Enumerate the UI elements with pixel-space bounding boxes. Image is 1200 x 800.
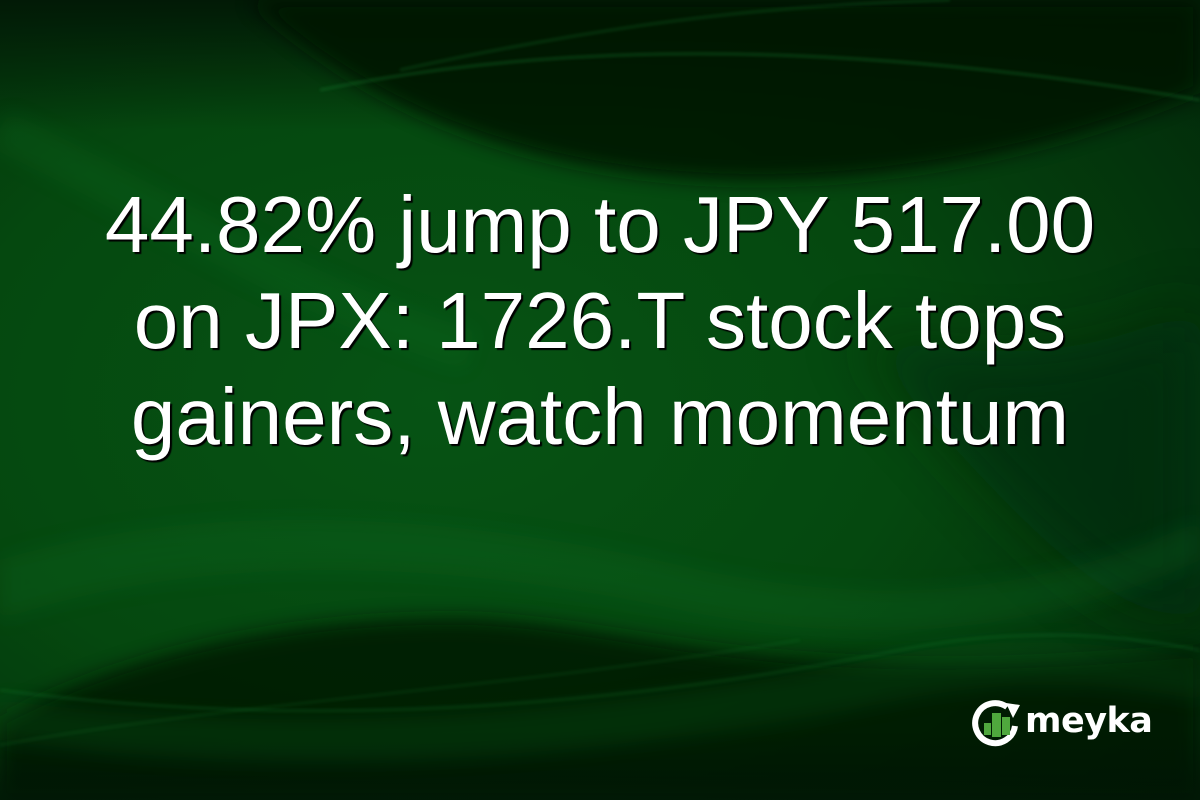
title: on JPX: 1726.T stock tops [134,276,1066,365]
title: gainers, watch momentum [131,372,1069,461]
icon: circular arrow with bars [972,700,1020,746]
title: 44.82% jump to JPY 517.00 [105,180,1095,269]
title [105,180,1095,463]
wordmark: meyka [1025,701,1152,741]
logo: meyka [972,700,1152,746]
